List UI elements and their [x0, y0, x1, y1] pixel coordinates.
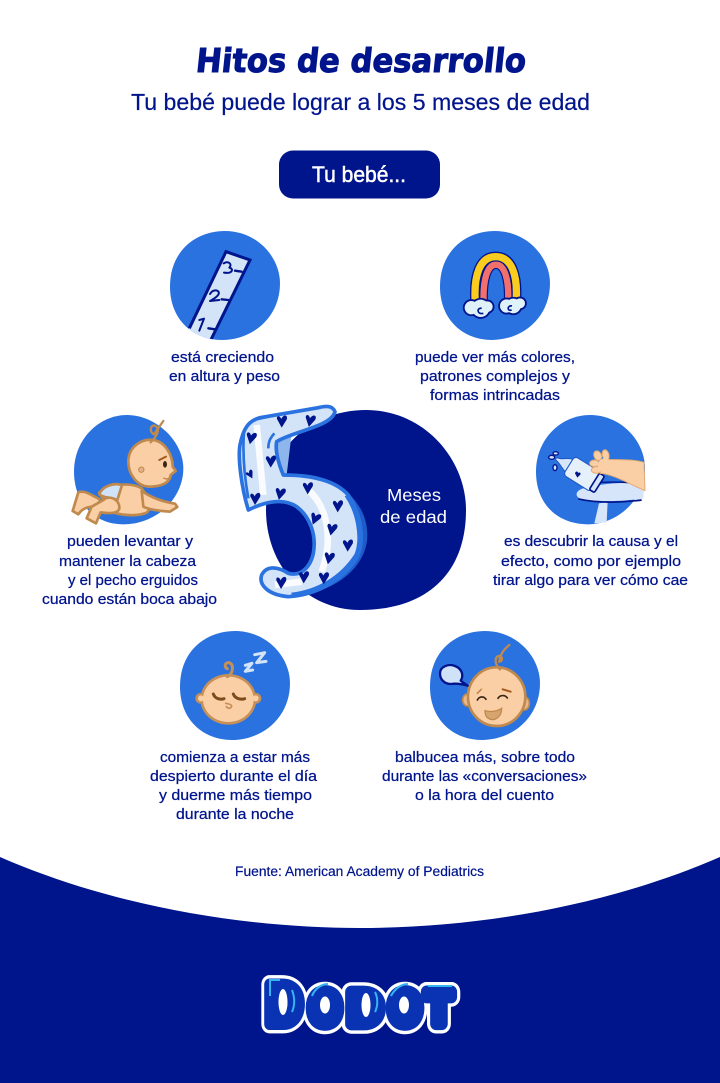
milestone: sleep [150, 631, 318, 823]
text: lifting head [42, 533, 217, 608]
text: sleep [150, 749, 318, 823]
text: height: está creciendo [171, 349, 274, 366]
text: height [169, 349, 280, 385]
logo: Dodot: D [266, 974, 302, 1037]
text: colours: formas intrincadas [430, 387, 560, 404]
icon: ruler [170, 231, 280, 342]
icon: rainbow [440, 231, 550, 340]
icon: talking baby [430, 631, 540, 740]
milestone: colours [415, 231, 575, 404]
milestone: babbling [382, 631, 587, 804]
icon: sleeping baby [180, 631, 290, 740]
text: cause and effect: efecto, como por ejemplo [501, 553, 681, 570]
logo: Dodot: D [348, 982, 382, 1034]
text: babbling: o la hora del cuento [415, 787, 554, 804]
text: sleep: comienza a estar más [160, 749, 310, 766]
text: colours: patrones complejos y [420, 368, 571, 385]
text: cause and effect [493, 533, 688, 589]
text: babbling [382, 749, 587, 804]
navy circle [266, 410, 466, 610]
text: cause and effect: es descubrir la causa y el [504, 533, 678, 550]
text: colours [415, 349, 575, 404]
logo: Dodot: D [348, 982, 382, 1034]
logo: Dodot: T [426, 983, 452, 1034]
source: Fuente: American Academy of Pediatrics [235, 864, 484, 879]
logo: Dodot: O [309, 983, 341, 1035]
logo: Dodot: O [389, 983, 421, 1035]
logo: Dodot: O [309, 983, 341, 1035]
button: Tu bebé: Tu bebé... [312, 162, 406, 187]
label: Meses de edad: Meses [387, 485, 441, 505]
text: sleep: y duerme más tiempo [159, 787, 312, 804]
milestone: lifting head [42, 415, 217, 608]
logo: Dodot: D [266, 974, 302, 1037]
text: lifting head: pueden levantar y [67, 533, 194, 550]
text: sleep: despierto durante el día [150, 768, 318, 785]
label: Meses de edad: de edad [380, 507, 447, 527]
logo: Dodot [266, 974, 452, 1037]
subtitle: Tu bebé puede lograr a los 5 meses de edad [131, 89, 590, 115]
text: lifting head: y el pecho erguidos [68, 572, 198, 589]
logo: Dodot: T [426, 983, 452, 1034]
text: lifting head: mantener la cabeza [59, 553, 197, 570]
label: Meses de edad [380, 485, 447, 527]
title: Hitos de desarrollo [194, 41, 528, 80]
text: sleep: durante la noche [176, 806, 294, 823]
text: babbling: balbucea más, sobre todo [395, 749, 575, 766]
centre: 5 meses de edad [239, 406, 466, 610]
text: cause and effect: tirar algo para ver cómo cae [493, 572, 688, 589]
logo: Dodot: O [389, 983, 421, 1035]
text: babbling: durante las «conversaciones» [382, 768, 587, 785]
text: lifting head: cuando están boca abajo [42, 591, 217, 608]
button: Tu bebé [279, 150, 440, 198]
icon: bottle and hand [536, 415, 645, 524]
footer wave [0, 857, 720, 1083]
text: colours: puede ver más colores, [415, 349, 575, 366]
milestone: height ruler [169, 231, 280, 385]
icon: crawling baby [73, 415, 183, 524]
milestone: cause and effect [493, 415, 688, 589]
numeral 5 [239, 406, 367, 597]
text: height: en altura y peso [169, 368, 280, 385]
